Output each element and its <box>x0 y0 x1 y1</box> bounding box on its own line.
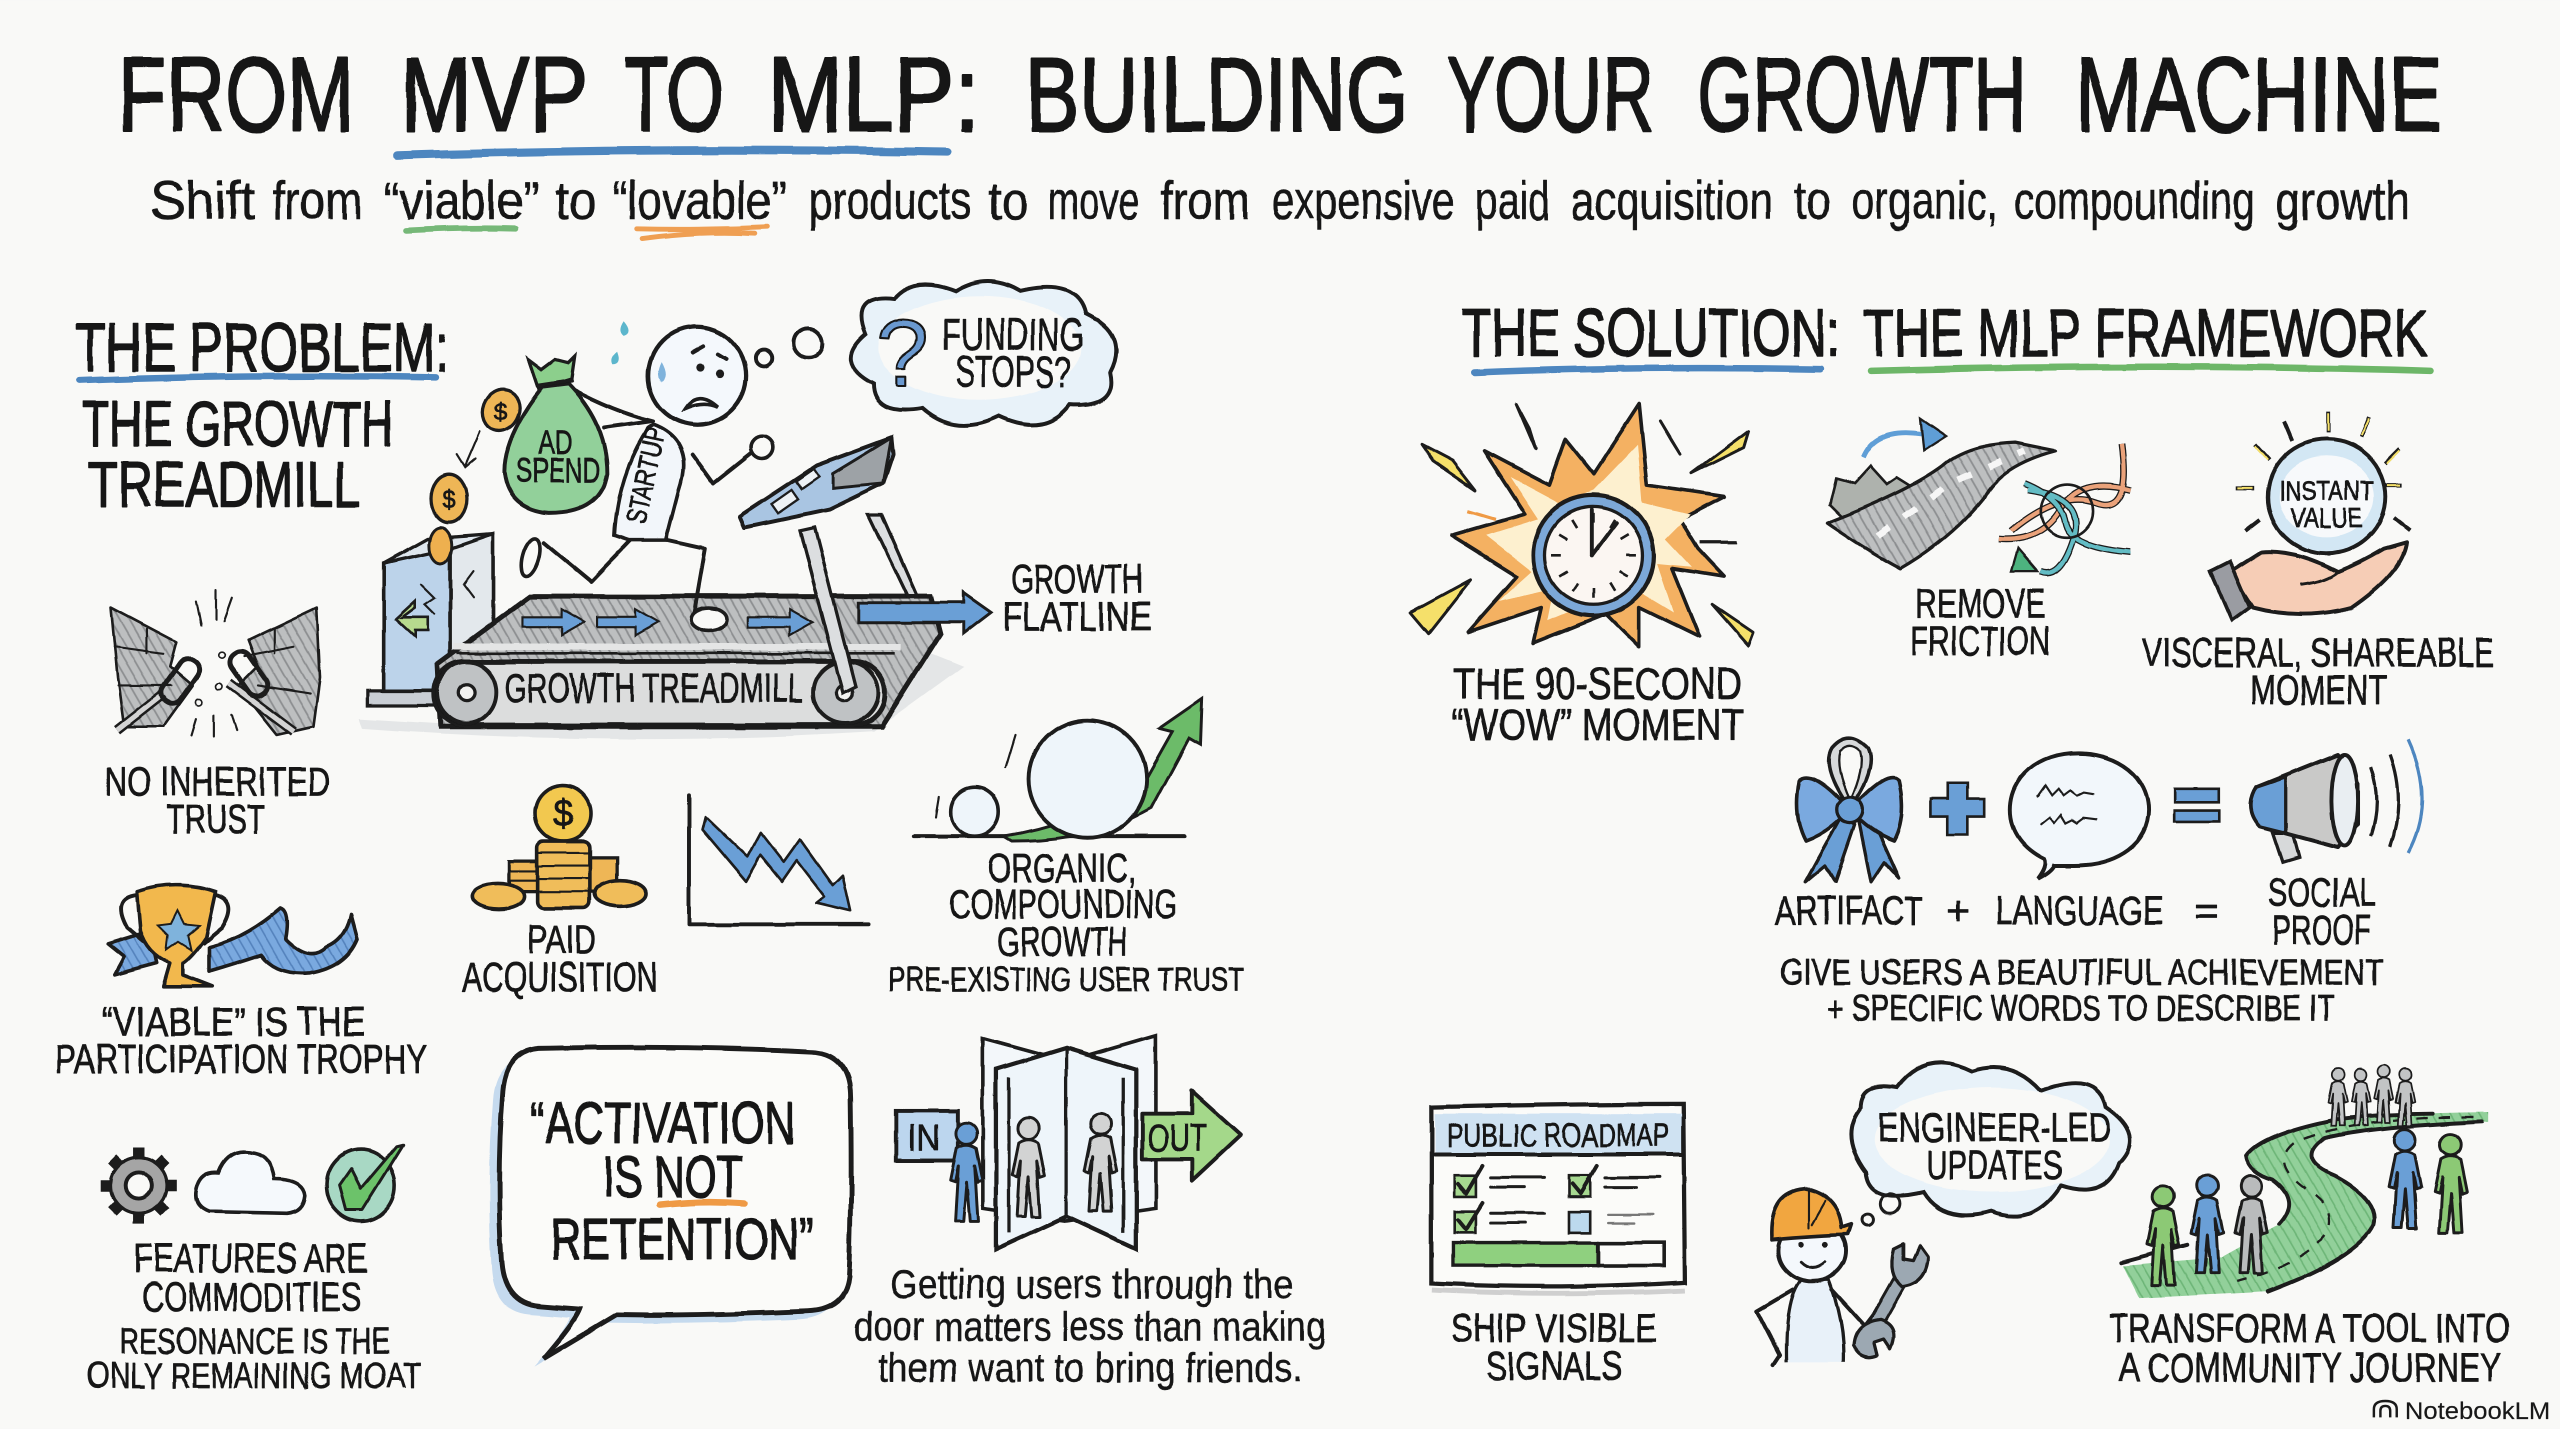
money bag: ad spend: AD <box>539 424 573 462</box>
subtitle: from <box>1161 171 1251 231</box>
thought cloud: funding stops: STOPS? <box>955 348 1071 397</box>
speech bubble: activation is not retention: IS NOT <box>602 1145 743 1210</box>
icon: snowball growth: COMPOUNDING <box>949 881 1177 927</box>
title: GROWTH <box>1696 36 2026 154</box>
icon: broken chain, no inherited trust: NO INHERITED <box>104 758 330 804</box>
treadmill <box>359 438 963 739</box>
subtitle: move <box>1048 171 1140 231</box>
icon: 90-second wow clock burst: THE 90-SECOND <box>1453 660 1742 709</box>
icon: equals <box>2175 789 2219 821</box>
icon: instant value in hand: INSTANT <box>2279 475 2374 506</box>
illustration: startup on treadmill <box>359 320 1151 739</box>
text: equation labels: PROOF <box>2273 907 2371 953</box>
icon: snowball growth: ORGANIC, <box>988 845 1136 891</box>
panel: public roadmap: SIGNALS <box>1486 1343 1623 1389</box>
treadmill: GROWTH TREADMILL <box>504 665 803 711</box>
text: equation labels: ARTIFACT <box>1775 887 1923 933</box>
speech bubble: activation is not retention: “ACTIVATION <box>531 1091 795 1156</box>
engineer with thought cloud <box>1757 1063 2130 1365</box>
title <box>118 36 2442 155</box>
stick figure: STARTUP <box>619 425 672 527</box>
icon: broken chain, no inherited trust <box>104 590 330 842</box>
cloud: engineer-led updates: ENGINEER-LED <box>1878 1104 2111 1150</box>
thought cloud: funding stops: ? <box>877 301 929 407</box>
title: MACHINE <box>2075 36 2442 154</box>
heading: the problem: THE PROBLEM: <box>75 309 449 386</box>
thought cloud: funding stops <box>756 281 1116 425</box>
subtitle <box>150 171 2410 239</box>
title: MVP <box>400 36 588 154</box>
icons: gear, cloud, check <box>87 1145 421 1396</box>
icon: remove friction road and tangle: REMOVE <box>1915 580 2046 626</box>
cloud: engineer-led updates: UPDATES <box>1927 1142 2062 1188</box>
icon: revolving door in and out: OUT <box>1148 1117 1207 1159</box>
heading: the problem <box>75 309 449 520</box>
text: equation labels: + SPECIFIC WORDS TO DESCRIBE IT <box>1827 988 2335 1029</box>
stick engineer <box>1757 1189 1928 1365</box>
logo: NotebookLM: NotebookLM <box>2405 1398 2550 1425</box>
thought cloud: funding stops: FUNDING <box>942 311 1084 360</box>
icon: remove friction road and tangle: FRICTION <box>1910 618 2051 664</box>
stick figure <box>518 320 774 630</box>
icon: instant value in hand <box>2142 412 2495 713</box>
panel: public roadmap <box>1432 1104 1685 1389</box>
icon: 90-second wow clock burst: “WOW” MOMENT <box>1451 701 1744 750</box>
cloud: engineer-led updates <box>1851 1063 2130 1226</box>
money bag: ad spend: $ <box>495 399 508 426</box>
subtitle: from <box>273 171 362 231</box>
icon: snowball growth: GROWTH <box>998 918 1128 964</box>
subtitle: Shift <box>150 171 255 231</box>
subtitle: acquisition <box>1571 171 1773 231</box>
icon: revolving door in and out: them want to bring friends. <box>878 1344 1303 1390</box>
icon: 90-second wow clock burst <box>1411 403 1753 750</box>
speech bubble: activation is not retention: RETENTION” <box>550 1207 813 1272</box>
heading: the problem: THE GROWTH <box>82 389 393 460</box>
icons: gear, cloud, check: ONLY REMAINING MOAT <box>87 1355 421 1396</box>
arrow: growth flatline: FLATLINE <box>1002 593 1151 639</box>
equation: artifact plus language equals social proof <box>1775 738 2422 1029</box>
icon: snowball growth <box>888 699 1244 999</box>
subtitle: to <box>1794 171 1830 231</box>
panel: public roadmap: SHIP VISIBLE <box>1451 1305 1657 1351</box>
text: equation labels: SOCIAL <box>2268 869 2376 915</box>
icon: paid acquisition coins: $ <box>553 792 573 834</box>
icon: remove friction road and tangle <box>1827 418 2131 664</box>
text: equation labels: GIVE USERS A BEAUTIFUL ACHIEVEMENT <box>1780 952 2384 993</box>
subtitle: “lovable” <box>612 171 787 231</box>
heading: the problem: TREADMILL <box>88 449 361 520</box>
subtitle: to <box>988 171 1029 231</box>
icon: instant value in hand: MOMENT <box>2250 667 2387 713</box>
subtitle: expensive <box>1272 171 1455 231</box>
arrow: growth flatline: GROWTH <box>1011 556 1143 602</box>
title: MLP: <box>767 36 980 154</box>
icon: megaphone <box>2251 740 2422 862</box>
text: equation labels <box>1775 869 2384 1029</box>
icon: ribbon <box>1797 738 1902 882</box>
icon: snowball growth: PRE-EXISTING USER TRUST <box>888 961 1244 999</box>
illustration: community journey <box>2109 1065 2509 1390</box>
icon: speech bubble <box>2010 753 2149 879</box>
icon: participation trophy: “VIABLE” IS THE <box>101 998 366 1044</box>
subtitle: to <box>555 171 596 231</box>
title: YOUR <box>1447 36 1654 154</box>
title: FROM <box>118 36 354 154</box>
icon: plus <box>1931 782 1984 834</box>
speech bubble: activation is not retention <box>489 1047 851 1367</box>
icon: participation trophy: PARTICIPATION TROPHY <box>56 1036 428 1082</box>
money bag: ad spend: $ <box>442 484 456 514</box>
chart: declining line <box>689 795 869 924</box>
icon: revolving door in and out: Getting users through the <box>890 1261 1293 1307</box>
icon: paid acquisition coins <box>462 786 658 1000</box>
icon: revolving door in and out: IN <box>908 1117 940 1159</box>
panel: public roadmap: PUBLIC ROADMAP <box>1447 1116 1670 1153</box>
money bag: ad spend <box>431 356 653 523</box>
subtitle: organic, <box>1851 171 1998 231</box>
icons: gear, cloud, check: COMMODITIES <box>142 1274 361 1320</box>
icon: instant value in hand: VALUE <box>2291 503 2362 534</box>
heading: the solution <box>1461 296 2431 372</box>
icons: gear, cloud, check: RESONANCE IS THE <box>119 1321 390 1362</box>
subtitle: growth <box>2276 171 2410 231</box>
icon: paid acquisition coins: PAID <box>527 917 596 963</box>
subtitle: paid <box>1476 171 1549 231</box>
text: equation labels: LANGUAGE <box>1995 887 2163 933</box>
subtitle: “viable” <box>384 171 539 231</box>
text: equation labels: + <box>1946 887 1971 933</box>
icons: gear, cloud, check: FEATURES ARE <box>134 1235 367 1281</box>
money bag: ad spend: SPEND <box>516 452 601 490</box>
icon: paid acquisition coins: ACQUISITION <box>462 954 658 1000</box>
arrow: growth flatline <box>859 556 1151 639</box>
icon: participation trophy <box>56 885 428 1082</box>
subtitle: compounding <box>2015 171 2255 231</box>
subtitle: products <box>808 171 971 231</box>
icon: broken chain, no inherited trust: TRUST <box>167 796 264 842</box>
text: equation labels: = <box>2194 887 2219 933</box>
heading: the solution: THE SOLUTION: <box>1461 296 1840 371</box>
title: BUILDING <box>1025 36 1409 154</box>
icon: revolving door in and out <box>854 1035 1326 1390</box>
title: TO <box>624 36 723 154</box>
icon: revolving door in and out: door matters less than making <box>854 1304 1326 1350</box>
wrench <box>1853 1244 1928 1357</box>
